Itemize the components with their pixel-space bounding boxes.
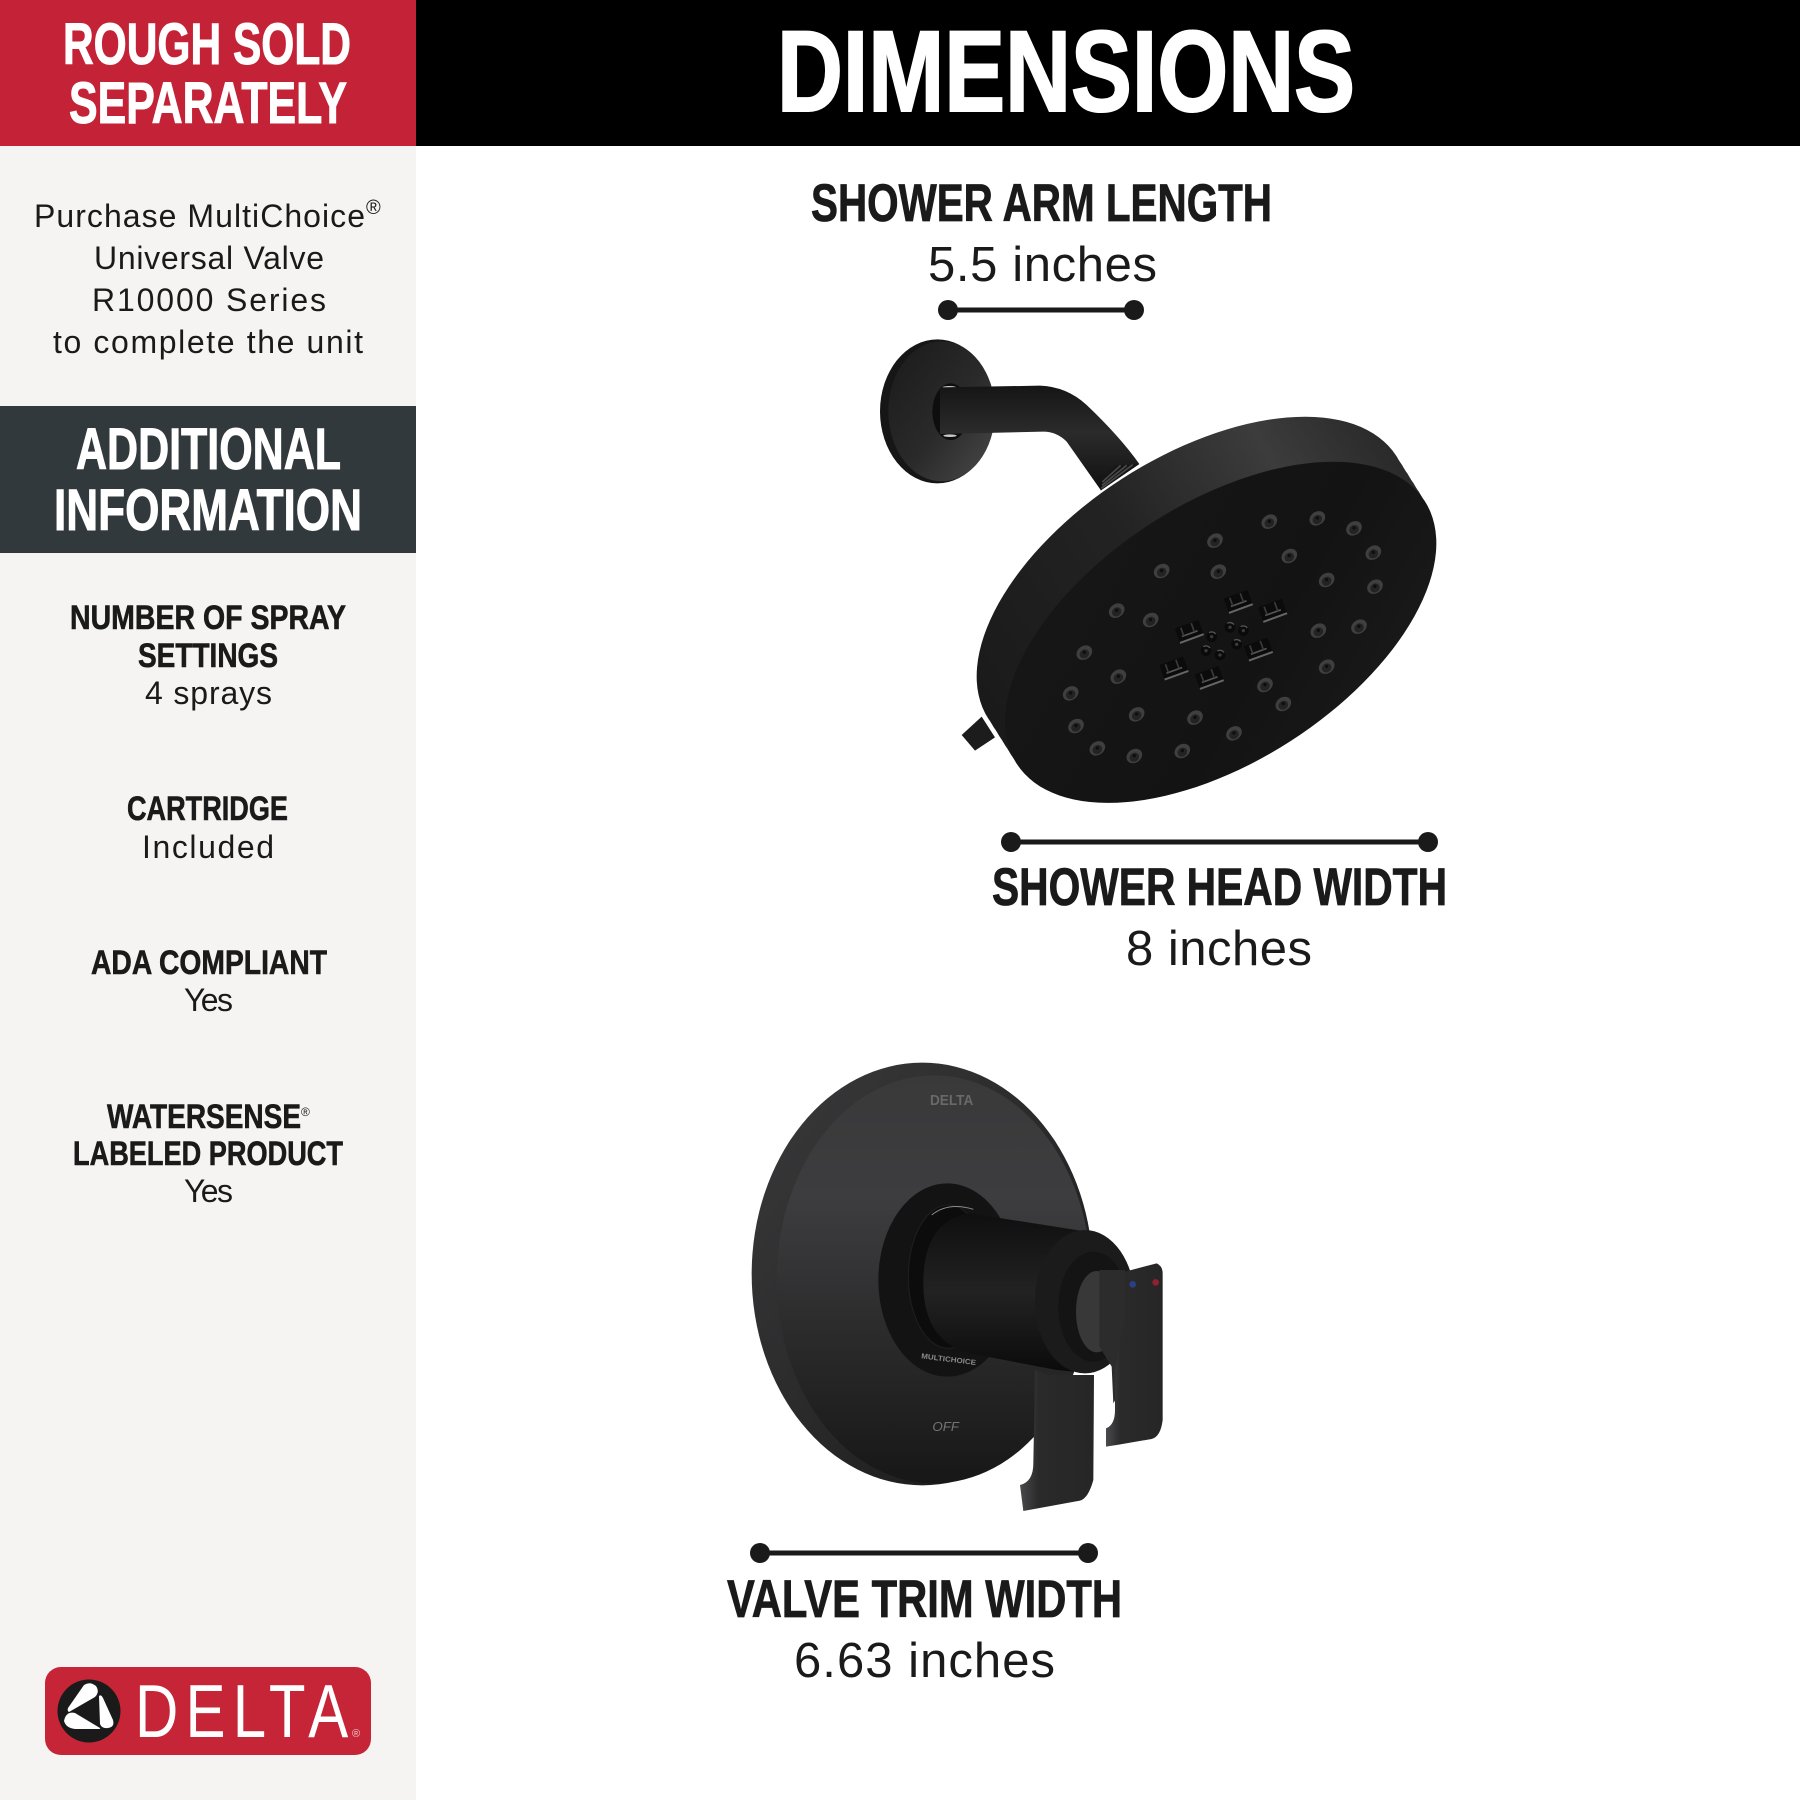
text block: purchase valve note: [34, 197, 381, 360]
logo: Delta: DELTA: [135, 1671, 355, 1754]
panel: sidebar background: [0, 0, 416, 1800]
threads: [1101, 464, 1139, 491]
plate label: DELTA: [930, 1093, 974, 1109]
temperature dots: [1129, 1281, 1136, 1288]
dimension: valve trim width: 6.63 inches: [794, 1634, 1055, 1688]
diverter knob: [962, 717, 995, 751]
text block: purchase valve note: to complete the unit: [53, 324, 363, 360]
product image: shower head: [918, 347, 1495, 872]
spec: ADA compliant: [91, 944, 327, 1018]
dimension: valve trim width: VALVE TRIM WIDTH: [727, 1570, 1122, 1629]
heading: additional information: INFORMATION: [54, 478, 362, 543]
text block: purchase valve note: ®: [366, 197, 381, 219]
dimension: shower head width: SHOWER HEAD WIDTH: [992, 858, 1447, 917]
shower arm: [940, 386, 1139, 490]
cylinder: [923, 1213, 1087, 1372]
dimension: shower head width: [992, 832, 1447, 976]
spec: watersense labeled product: LABELED PRODUCT: [73, 1135, 343, 1173]
hub text: MULTICHOICE: [921, 1351, 977, 1367]
front lever: [1020, 1370, 1094, 1511]
text block: purchase valve note: Purchase MultiChoice: [34, 198, 365, 234]
spec: ADA compliant: ADA COMPLIANT: [91, 944, 327, 982]
spray nozzles: [1060, 508, 1386, 766]
ring highlight: [932, 1207, 973, 1215]
logo: Delta: ®: [352, 1728, 360, 1740]
spec: cartridge: Included: [142, 829, 274, 865]
product image: shower arm and wall flange: [880, 339, 1139, 491]
off label: OFF: [932, 1419, 960, 1434]
dimension: shower arm length: SHOWER ARM LENGTH: [811, 174, 1272, 233]
spec: number of spray settings: 4 sprays: [145, 675, 272, 711]
spec: watersense labeled product: Yes: [184, 1173, 233, 1209]
ring recess: [1076, 1271, 1117, 1352]
product image: valve trim: [752, 1063, 1163, 1511]
hub: [878, 1183, 1016, 1377]
banner: rough sold separately: ROUGH SOLD: [63, 12, 351, 77]
spec: watersense labeled product: ®: [301, 1105, 310, 1119]
text block: purchase valve note: Universal Valve: [94, 240, 324, 276]
spec: watersense labeled product: WATERSENSE: [107, 1098, 301, 1136]
spec: ADA compliant: Yes: [184, 982, 233, 1018]
ring: [1035, 1230, 1135, 1373]
heading: additional information: ADDITIONAL: [76, 417, 341, 482]
title banner: dimensions: [416, 0, 1800, 146]
inner ring: [908, 1205, 988, 1348]
spec: number of spray settings: [70, 599, 346, 711]
dimension: shower head width: 8 inches: [1126, 922, 1312, 976]
front plate: [777, 1075, 1091, 1483]
wall flange: [880, 339, 995, 483]
banner: rough sold separately: [0, 0, 416, 146]
heading: additional information: [0, 406, 416, 553]
spec: cartridge: [127, 790, 288, 865]
dimension: shower arm length: [811, 174, 1272, 320]
title banner: dimensions: DIMENSIONS: [777, 8, 1355, 136]
dimension: shower arm length: 5.5 inches: [928, 238, 1157, 292]
rear lever: [1106, 1263, 1163, 1447]
shower head face: [947, 392, 1495, 872]
logo: Delta: [45, 1667, 371, 1755]
stem: [1099, 1270, 1125, 1403]
spec: number of spray settings: NUMBER OF SPRAY: [70, 599, 346, 637]
spec: cartridge: CARTRIDGE: [127, 790, 288, 828]
banner: rough sold separately: SEPARATELY: [69, 71, 347, 136]
square spray jets: [1159, 590, 1287, 690]
shower head body: [918, 347, 1489, 863]
dimension: valve trim width: [727, 1543, 1122, 1688]
center nozzles: [1201, 622, 1249, 660]
spec: watersense labeled product: [73, 1098, 343, 1209]
back plate: [752, 1063, 1093, 1485]
text block: purchase valve note: R10000 Series: [92, 282, 326, 318]
spec: number of spray settings: SETTINGS: [138, 637, 278, 675]
